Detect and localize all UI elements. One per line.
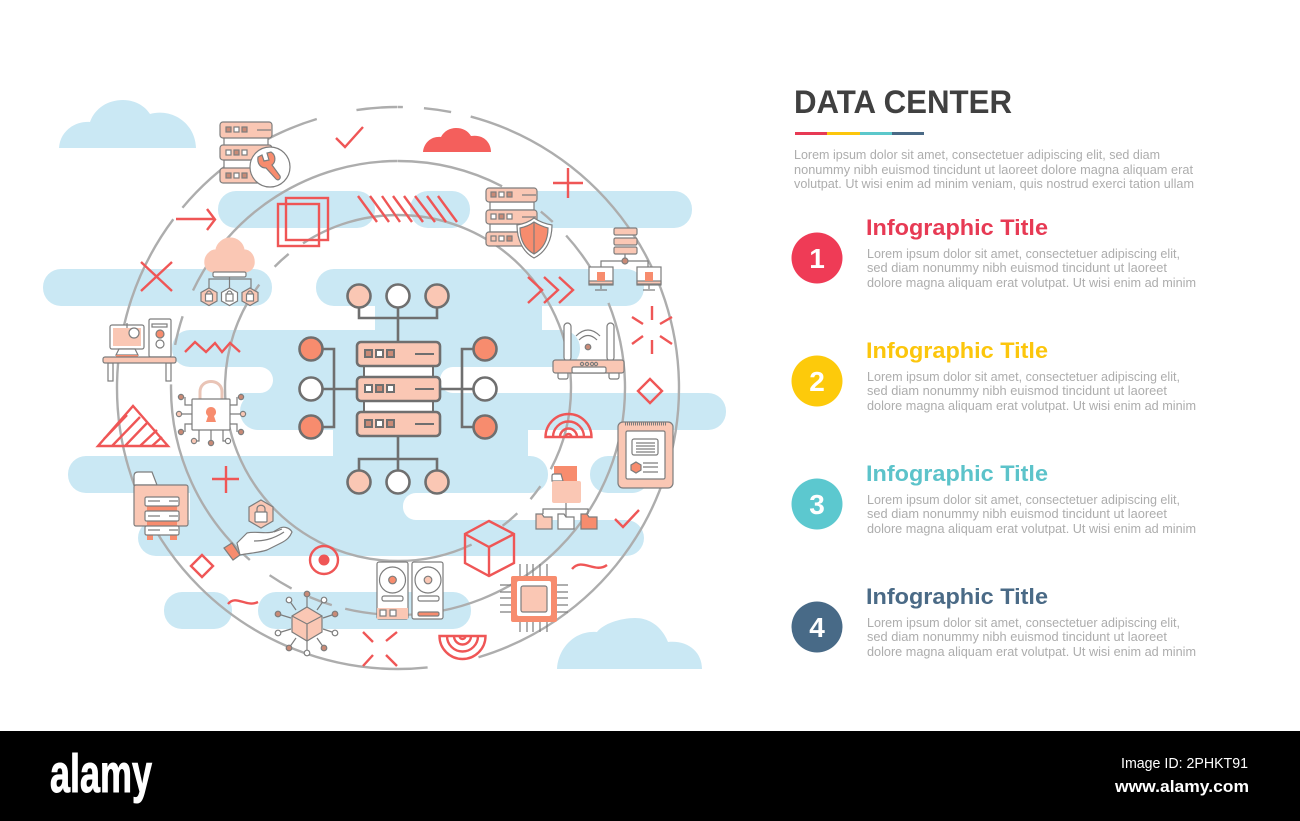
background: blue clouds and bands (43, 100, 726, 669)
item 4: sed diam nonummy nibh euismod tincidunt ut laoreet (867, 630, 1168, 644)
item 1: 1 (809, 243, 825, 274)
colored divider (795, 132, 924, 135)
icon: network server with two monitors (589, 228, 661, 290)
icon: server with shield (486, 188, 552, 258)
icon: document card (618, 422, 673, 488)
item 4 (792, 584, 1196, 659)
icon: server with wrench (220, 122, 290, 187)
item 2: 2 (809, 366, 825, 397)
item 2: Lorem ipsum dolor sit amet, consectetuer adipiscing elit, (867, 370, 1180, 384)
item 1 (792, 215, 1196, 290)
icon: processor chip (500, 564, 568, 632)
footer watermark bar: alamy (50, 744, 152, 804)
item 2: Infographic Title (866, 338, 1048, 363)
item 1: Infographic Title (866, 215, 1048, 240)
concentric dashed rings (117, 107, 679, 669)
title: DATA CENTER (794, 84, 1012, 120)
intro paragraph: volutpat. Ut wisi enim ad minim veniam, quis nostrud exerci tation ullam (794, 177, 1194, 191)
icon: computer on desk (103, 319, 176, 381)
item 4: Infographic Title (866, 584, 1048, 609)
icon: hard drives (377, 562, 443, 619)
icon: cloud with locks (201, 238, 258, 306)
icon: folder with servers (134, 472, 188, 540)
icon: folder tree (536, 466, 597, 529)
red decorative shapes (98, 127, 672, 666)
item 2: sed diam nonummy nibh euismod tincidunt ut laoreet (867, 384, 1168, 398)
central network diagram (300, 284, 496, 494)
item 1: sed diam nonummy nibh euismod tincidunt ut laoreet (867, 261, 1168, 275)
footer watermark bar: Image ID: 2PHKT91 (1121, 755, 1248, 772)
item 3: 3 (809, 489, 825, 520)
item 3 (792, 461, 1196, 536)
icon: padlock with circuit (176, 382, 246, 446)
item 2 (792, 338, 1196, 413)
intro paragraph: nonummy nibh euismod tincidunt ut laoreet dolore magna aliquam erat (794, 163, 1194, 177)
server stack (357, 342, 440, 436)
footer watermark bar: www.alamy.com (1114, 777, 1249, 796)
connector lines (323, 308, 473, 470)
item 1: Lorem ipsum dolor sit amet, consectetuer adipiscing elit, (867, 247, 1180, 261)
item 3: Lorem ipsum dolor sit amet, consectetuer adipiscing elit, (867, 493, 1180, 507)
item 3: dolore magna aliquam erat volutpat. Ut wisi enim ad minim (867, 522, 1196, 536)
item 3: Infographic Title (866, 461, 1048, 486)
item 4: dolore magna aliquam erat volutpat. Ut wisi enim ad minim (867, 645, 1196, 659)
item 2: dolore magna aliquam erat volutpat. Ut wisi enim ad minim (867, 399, 1196, 413)
item 4: Lorem ipsum dolor sit amet, consectetuer adipiscing elit, (867, 616, 1180, 630)
node circles (300, 284, 496, 494)
item 3: sed diam nonummy nibh euismod tincidunt ut laoreet (867, 507, 1168, 521)
item 1: dolore magna aliquam erat volutpat. Ut wisi enim ad minim (867, 276, 1196, 290)
item 4: 4 (809, 612, 825, 643)
icon: cube network (275, 591, 338, 656)
icon: hand holding lock (224, 500, 292, 560)
footer watermark bar (0, 731, 1300, 821)
icon: wifi router (553, 323, 624, 379)
intro paragraph: Lorem ipsum dolor sit amet, consectetuer adipiscing elit, sed diam (794, 148, 1160, 162)
